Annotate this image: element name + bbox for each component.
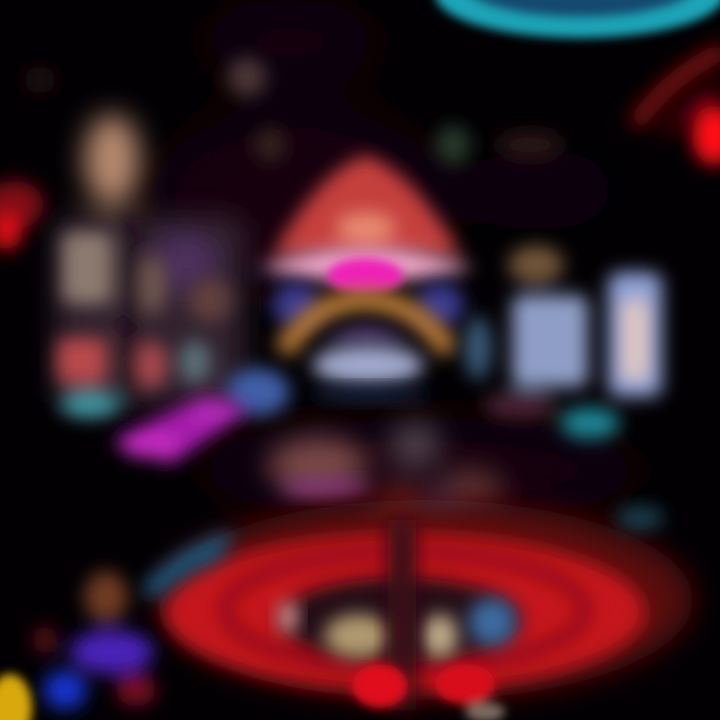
bottom left figure xyxy=(33,571,156,710)
wheel outer rim xyxy=(157,500,693,700)
arch inner xyxy=(322,325,412,345)
top right red arcs xyxy=(635,50,720,165)
yellow corner xyxy=(0,674,32,720)
slot machine panels xyxy=(57,220,290,418)
rainbow arch xyxy=(283,300,450,352)
wheel inner dark xyxy=(280,578,520,662)
canopy highlight xyxy=(336,212,396,244)
right slot machines xyxy=(464,245,662,439)
canopy magenta core xyxy=(327,258,403,294)
top right cyan ring xyxy=(435,0,720,38)
wheel hub left xyxy=(324,614,392,658)
ceiling lights xyxy=(24,57,564,165)
left slot machines xyxy=(55,114,245,405)
machine base xyxy=(312,345,424,385)
wheel highlight xyxy=(278,601,298,633)
red shoes xyxy=(352,664,505,720)
wheel hub right xyxy=(422,614,458,658)
left red neon xyxy=(0,181,44,250)
canopy pink band xyxy=(258,246,474,282)
wheel red ring xyxy=(165,534,645,690)
wheel ring groove xyxy=(225,552,585,668)
centre canopy xyxy=(258,155,474,402)
roulette wheel xyxy=(157,500,693,700)
blue side right xyxy=(416,283,464,327)
wheel blue accent xyxy=(468,598,516,646)
centre pole xyxy=(388,520,416,710)
teal wedge xyxy=(616,506,664,530)
background glow xyxy=(150,0,650,520)
centre figure xyxy=(268,421,504,600)
purple floor panel xyxy=(112,395,250,465)
blue side left xyxy=(272,283,320,327)
canopy dome xyxy=(272,155,462,255)
blue wedge xyxy=(140,530,235,600)
figure sash xyxy=(281,479,369,497)
base shadow xyxy=(310,386,430,402)
